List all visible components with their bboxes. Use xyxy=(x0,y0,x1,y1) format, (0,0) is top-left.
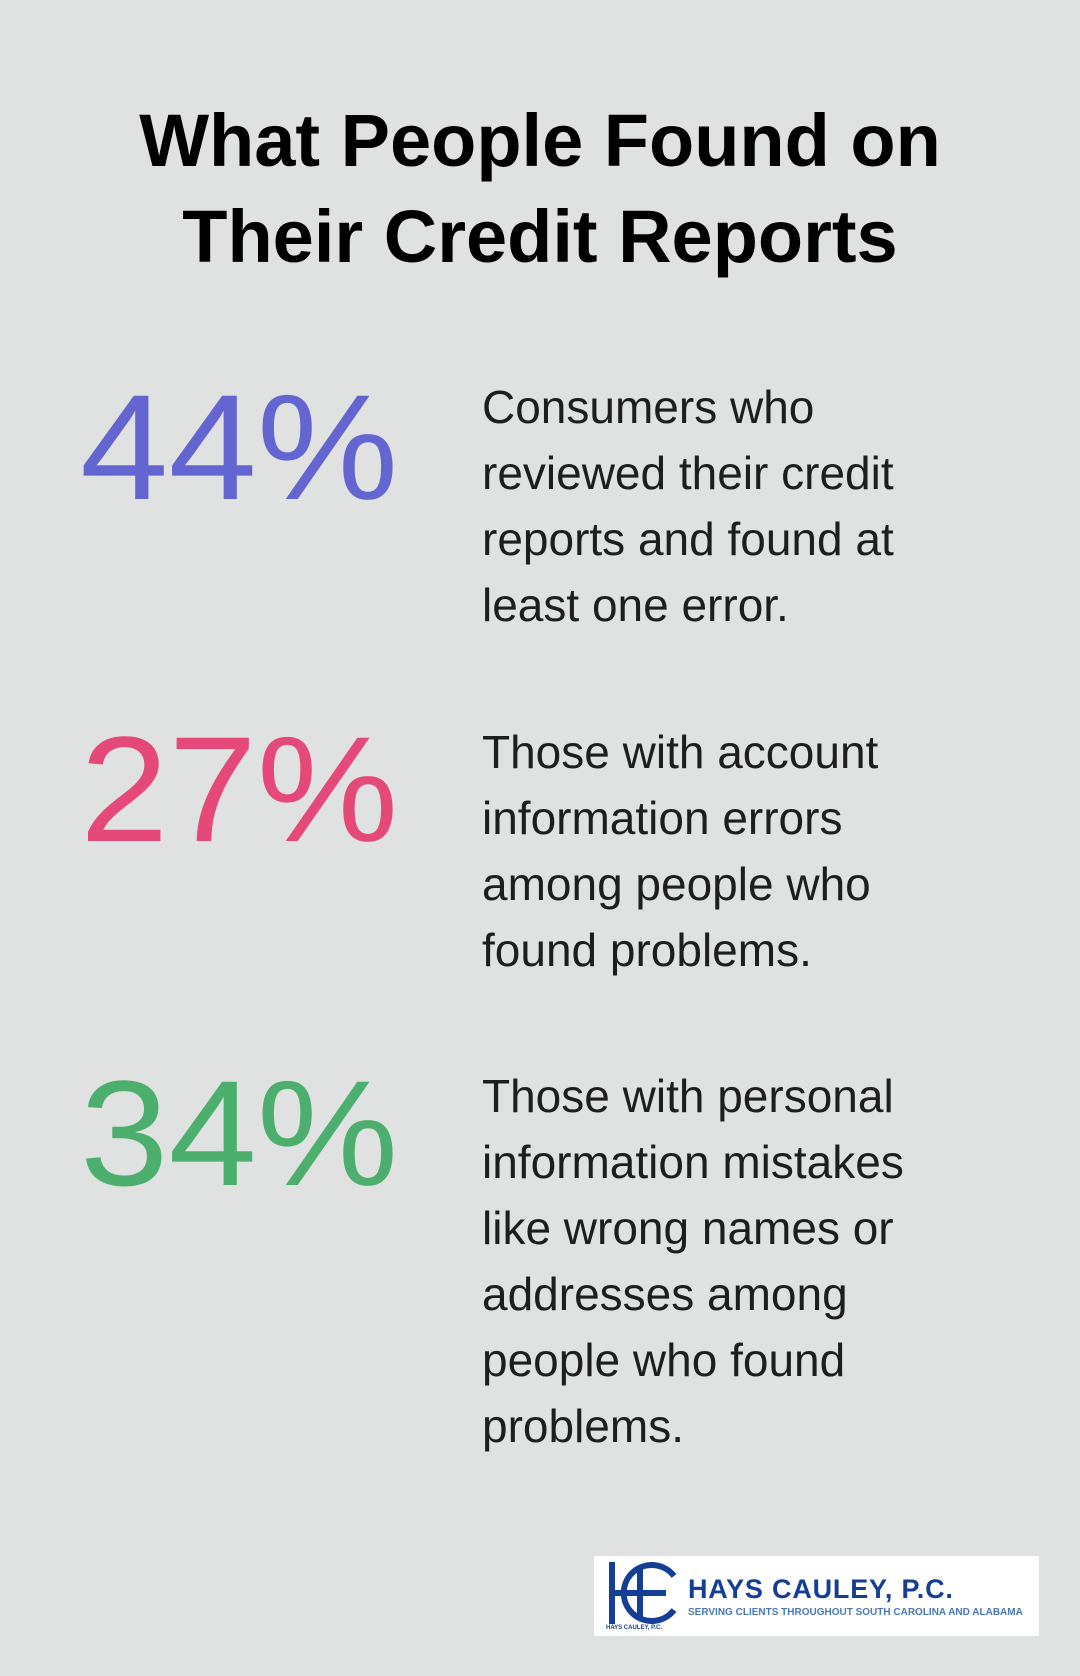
text: 27% description: among people who xyxy=(482,858,871,910)
text: 27% description: information errors xyxy=(482,792,842,844)
text: 44% description: reports and found at xyxy=(482,513,894,565)
text: 44% description: least one error. xyxy=(482,579,789,631)
text: 34% description: like wrong names or xyxy=(482,1202,894,1254)
text: 27% description: Those with account xyxy=(482,726,878,778)
logo small name: HAYS CAULEY, P.C. xyxy=(606,1625,662,1631)
text: 34% description: people who found xyxy=(482,1334,845,1386)
text: 27% description: found problems. xyxy=(482,924,812,976)
logo xyxy=(594,1556,1039,1636)
stat: 27%: 27% xyxy=(80,705,398,873)
title: Their Credit Reports xyxy=(182,195,898,278)
logo tagline: SERVING CLIENTS THROUGHOUT SOUTH CAROLINA AND ALABAMA xyxy=(688,1607,1023,1618)
text: 34% description: Those with personal xyxy=(482,1070,894,1122)
text: 44% description: reviewed their credit xyxy=(482,447,894,499)
text: 34% description: addresses among xyxy=(482,1268,848,1320)
icon: HC monogram xyxy=(609,1562,676,1624)
stat: 34%: 34% xyxy=(80,1049,398,1217)
text: 34% description: information mistakes xyxy=(482,1136,904,1188)
stat: 44%: 44% xyxy=(80,363,398,531)
text: 27% description xyxy=(482,726,878,976)
text: 34% description xyxy=(482,1070,904,1452)
logo name: HAYS CAULEY, P.C. xyxy=(688,1574,954,1604)
text: 44% description: Consumers who xyxy=(482,381,814,433)
title xyxy=(139,99,941,278)
text: 44% description xyxy=(482,381,894,631)
title: What People Found on xyxy=(139,99,941,182)
text: 34% description: problems. xyxy=(482,1400,684,1452)
